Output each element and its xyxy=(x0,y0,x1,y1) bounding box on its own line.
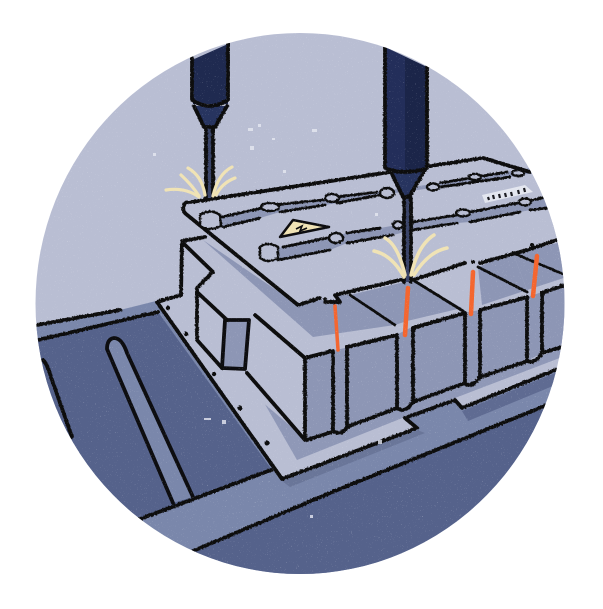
floor xyxy=(30,300,570,580)
top shadows under lid xyxy=(203,240,395,337)
serial label xyxy=(482,185,533,203)
floor lines xyxy=(37,310,120,325)
lid lines xyxy=(185,158,530,203)
floor slot xyxy=(107,338,193,503)
bolts xyxy=(200,170,531,261)
box lines xyxy=(181,237,222,368)
wall speckle clusters xyxy=(153,124,382,518)
black ink outlines xyxy=(37,158,570,551)
side handle xyxy=(222,320,249,369)
left sparks xyxy=(166,167,235,197)
rails xyxy=(220,168,548,262)
background wall xyxy=(30,25,570,355)
rail outlines xyxy=(222,172,507,217)
front face xyxy=(305,283,570,440)
cylinder lines xyxy=(333,347,347,433)
plate holes xyxy=(166,306,170,310)
right sparks xyxy=(374,235,447,277)
battery box xyxy=(181,225,570,440)
lid xyxy=(321,172,558,301)
warning triangle xyxy=(280,220,329,237)
orange weld seams xyxy=(335,256,537,350)
base plate xyxy=(157,294,570,487)
lid tabs xyxy=(323,297,327,301)
right laser probe xyxy=(385,47,427,282)
plate edge xyxy=(157,302,570,479)
illustration: laser welding of a battery module xyxy=(36,33,564,574)
left laser probe xyxy=(192,44,228,198)
